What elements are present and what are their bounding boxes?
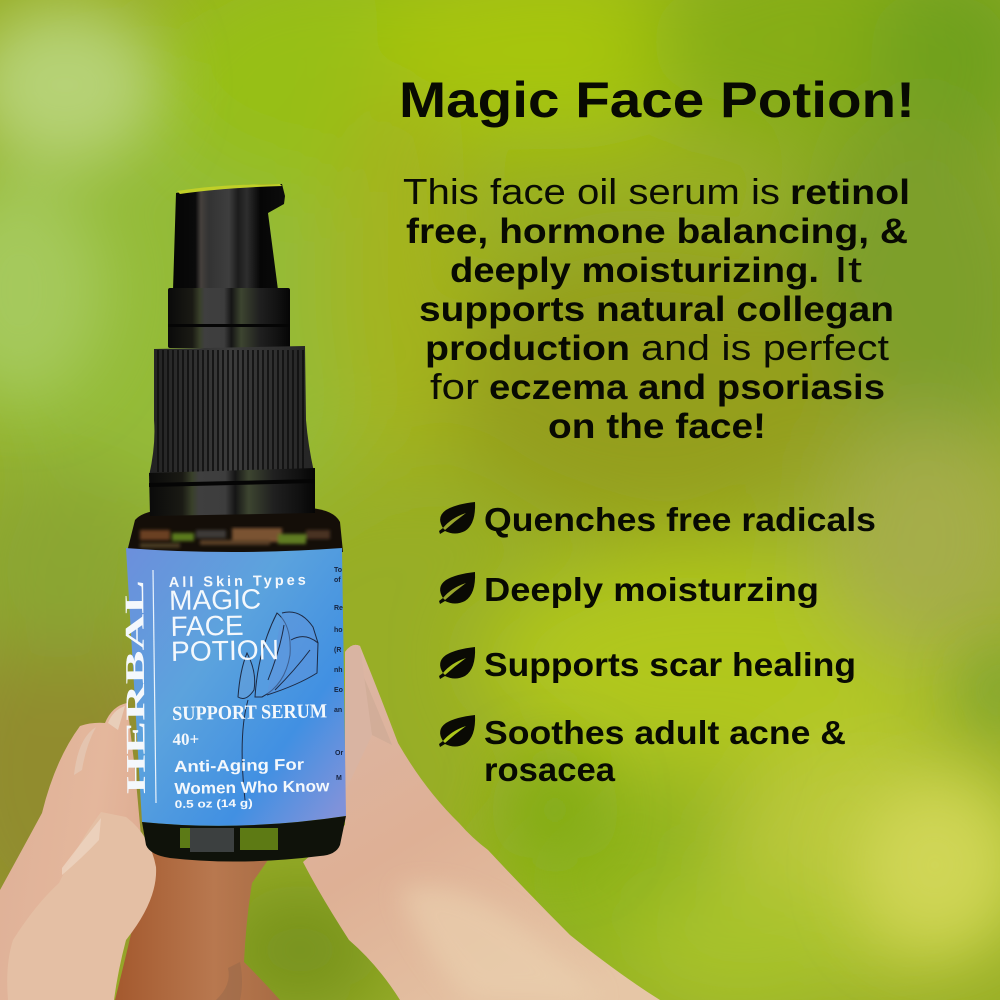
hand: lower left finger <box>7 812 156 1000</box>
label text: product name: SUPPORT SERUM <box>172 700 327 725</box>
label side text <box>334 567 343 782</box>
ribbed cap <box>149 346 314 476</box>
body paragraph: It <box>834 249 862 290</box>
label side text: (R <box>334 647 341 654</box>
hand: thumb on the right <box>303 645 660 1000</box>
body paragraph: supports natural collegan <box>419 290 894 329</box>
label text: product name: POTION <box>171 634 279 667</box>
label text: brand: HERBAL <box>119 580 151 794</box>
benefit: soothes adult acne and rosacea <box>439 714 846 788</box>
hand: back finger behind bottle <box>115 850 280 1000</box>
label side text: Eo <box>334 687 343 694</box>
label text: product name: All Skin Types <box>169 573 306 591</box>
icon: leaf <box>439 502 475 534</box>
icon: leaf <box>439 647 475 679</box>
body paragraph: for <box>430 366 479 407</box>
body paragraph: and is perfect <box>641 327 889 368</box>
label <box>119 548 346 826</box>
pump head <box>173 184 285 290</box>
body paragraph: free, hormone balancing, & <box>406 212 908 251</box>
benefit: soothes adult acne and rosacea: rosacea <box>484 751 616 788</box>
label text: product name: MAGIC <box>169 583 261 616</box>
benefit: deeply moisturzing: Deeply moisturzing <box>484 571 819 608</box>
label text: product name: 0.5 oz (14 g) <box>175 798 253 811</box>
bottle base <box>142 816 346 862</box>
body paragraph: on the face! <box>548 407 766 446</box>
label side text: of <box>334 577 341 584</box>
label text: product name <box>169 572 330 811</box>
body paragraph <box>403 171 910 446</box>
label text: product name: FACE <box>170 610 244 642</box>
pump collar <box>168 288 290 348</box>
benefit: soothes adult acne and rosacea: Soothes adult acne & <box>484 714 846 751</box>
icon: leaf <box>439 715 475 747</box>
bottle <box>119 184 346 862</box>
body paragraph: retinol <box>790 173 910 212</box>
body paragraph: eczema and psoriasis <box>489 368 885 407</box>
label side text: M <box>336 775 342 782</box>
label text: product name: 40+ <box>172 730 199 749</box>
thumb tip over bottle edge <box>345 645 372 790</box>
label side text: Or <box>335 750 343 757</box>
label side text: To <box>334 567 342 574</box>
icon: leaf <box>439 572 475 604</box>
label text: product name: Anti-Aging For <box>174 757 304 776</box>
label side text: nh <box>334 667 343 674</box>
benefit: quenches free radicals: Quenches free radicals <box>484 501 876 538</box>
body paragraph: production <box>425 329 630 368</box>
label text: product name: Women Who Know <box>174 778 330 798</box>
title: Magic Face Potion! <box>399 72 915 128</box>
label side text: Re <box>334 605 343 612</box>
benefit: supports scar healing: Supports scar healing <box>484 646 856 683</box>
label illustration: flower <box>238 612 318 800</box>
label side text: an <box>334 707 342 714</box>
label side text: ho <box>334 627 343 634</box>
bottle glass shoulder <box>127 508 343 552</box>
cap lower ring <box>149 468 315 516</box>
body paragraph: This face oil serum is <box>403 171 780 212</box>
body paragraph: deeply moisturizing. <box>450 251 819 290</box>
hand: upper left finger <box>0 703 145 1000</box>
